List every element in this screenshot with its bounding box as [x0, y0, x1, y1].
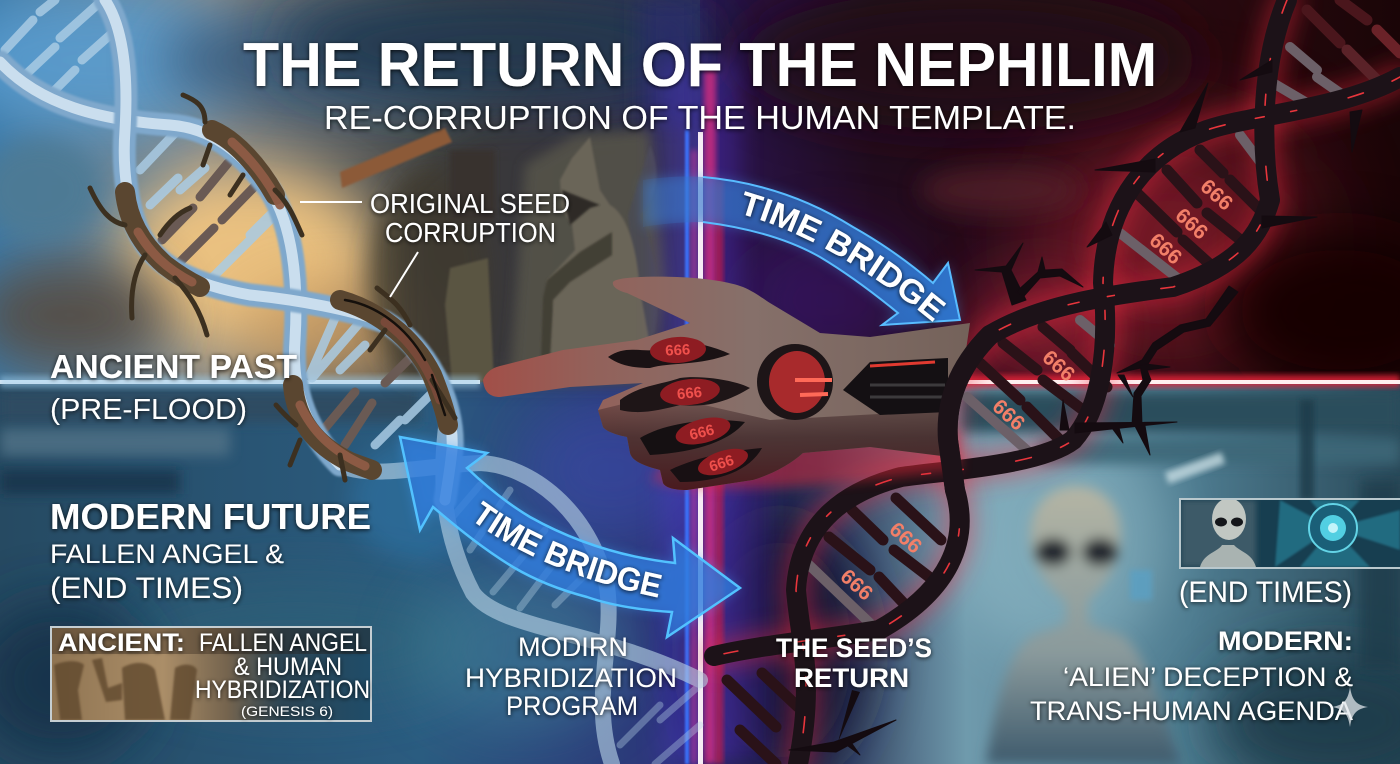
panel: ancient hybridization: HYBRIDIZATION: [195, 676, 370, 704]
callout: original seed corruption: ORIGINAL SEED: [370, 188, 570, 219]
cavities with 666: 666: [707, 452, 736, 476]
callout: original seed corruption: [300, 188, 570, 297]
icon: corrupted strand claws: [90, 95, 455, 480]
label: modirn hybridization program: MODIRN: [518, 632, 628, 662]
icon: sparkle watermark: [1332, 687, 1368, 727]
panel: ancient hybridization: ANCIENT:: [58, 629, 185, 657]
label: modern alien deception: TRANS-HUMAN AGENDA: [1030, 696, 1353, 726]
label: modern alien deception: ‘ALIEN’ DECEPTION &: [1063, 662, 1353, 692]
panel: alien and circuit thumbnail: [1180, 498, 1400, 568]
panel: ancient hybridization: & HUMAN: [234, 653, 342, 681]
labels: 666 on strand: 666: [1145, 229, 1186, 269]
label: modern future: (END TIMES): [50, 572, 243, 605]
labels: 666 on strand: 666: [885, 518, 926, 558]
label: modern future: MODERN FUTURE: [50, 496, 371, 537]
label: modirn hybridization program: [465, 632, 677, 721]
labels: 666 on strand: 666: [1038, 346, 1079, 386]
panel: ancient hybridization: (GENESIS 6): [241, 703, 333, 719]
title: THE RETURN OF THE NEPHILIM: [243, 31, 1157, 100]
cavities with 666: 666: [688, 421, 716, 444]
arrow: upper time bridge: [636, 170, 965, 330]
label: modirn hybridization program: PROGRAM: [506, 691, 638, 721]
central vertical light beam: [660, 60, 740, 764]
label: modirn hybridization program: HYBRIDIZATION: [465, 663, 677, 693]
panel: ancient hybridization: [51, 627, 371, 721]
mechanical core: [757, 344, 948, 420]
alien figure: [986, 486, 1180, 764]
label: ancient past: ANCIENT PAST: [50, 348, 297, 385]
label: ancient past: (PRE-FLOOD): [50, 394, 247, 426]
label: the seed's return: RETURN: [794, 663, 909, 693]
labels: 666 on strand: [836, 175, 1237, 605]
horizontal horizon line: [0, 375, 1400, 388]
labels: 666 on strand: 666: [988, 395, 1029, 435]
DNA helix: ancient, blue and corrupted: [0, 0, 452, 500]
hand: [483, 277, 970, 490]
cavities with 666: 666: [665, 341, 691, 360]
label: modern future: [50, 496, 371, 605]
label: lower bridge text: TIME BRIDGE: [474, 499, 664, 602]
panel: ancient hybridization: FALLEN ANGEL: [199, 629, 367, 657]
stone relief: winged figure and lintel: [340, 120, 690, 382]
DNA helix: present, dark and thorned: [714, 0, 1400, 764]
labels: 666 on strand: 666: [1171, 204, 1212, 244]
labels: 666 on strand: 666: [1196, 175, 1237, 215]
label: end times: (END TIMES): [1179, 576, 1352, 609]
label: modern alien deception: MODERN:: [1218, 626, 1353, 656]
callout: original seed corruption: CORRUPTION: [385, 217, 556, 248]
subtitle: RE-CORRUPTION OF THE HUMAN TEMPLATE.: [324, 99, 1076, 136]
label: modern future: FALLEN ANGEL &: [50, 539, 284, 569]
label: the seed's return: [776, 633, 932, 693]
label: upper bridge text: TIME BRIDGE: [742, 190, 948, 324]
label: ancient past: [50, 348, 297, 426]
strand crossing over the wrist: [948, 335, 990, 490]
labels: 666 on strand: 666: [836, 565, 877, 605]
faint lower helix (modern hybridization): [340, 420, 700, 764]
title: [243, 31, 1157, 136]
label: the seed's return: THE SEED’S: [776, 633, 932, 663]
cavities with 666: [608, 336, 762, 482]
cavities with 666: 666: [676, 384, 703, 403]
arrow: lower time bridge: [397, 434, 742, 640]
icon: carved figures: [54, 658, 197, 720]
thorns on the dark helix: [789, 60, 1362, 755]
label: modern alien deception: [1030, 626, 1353, 726]
